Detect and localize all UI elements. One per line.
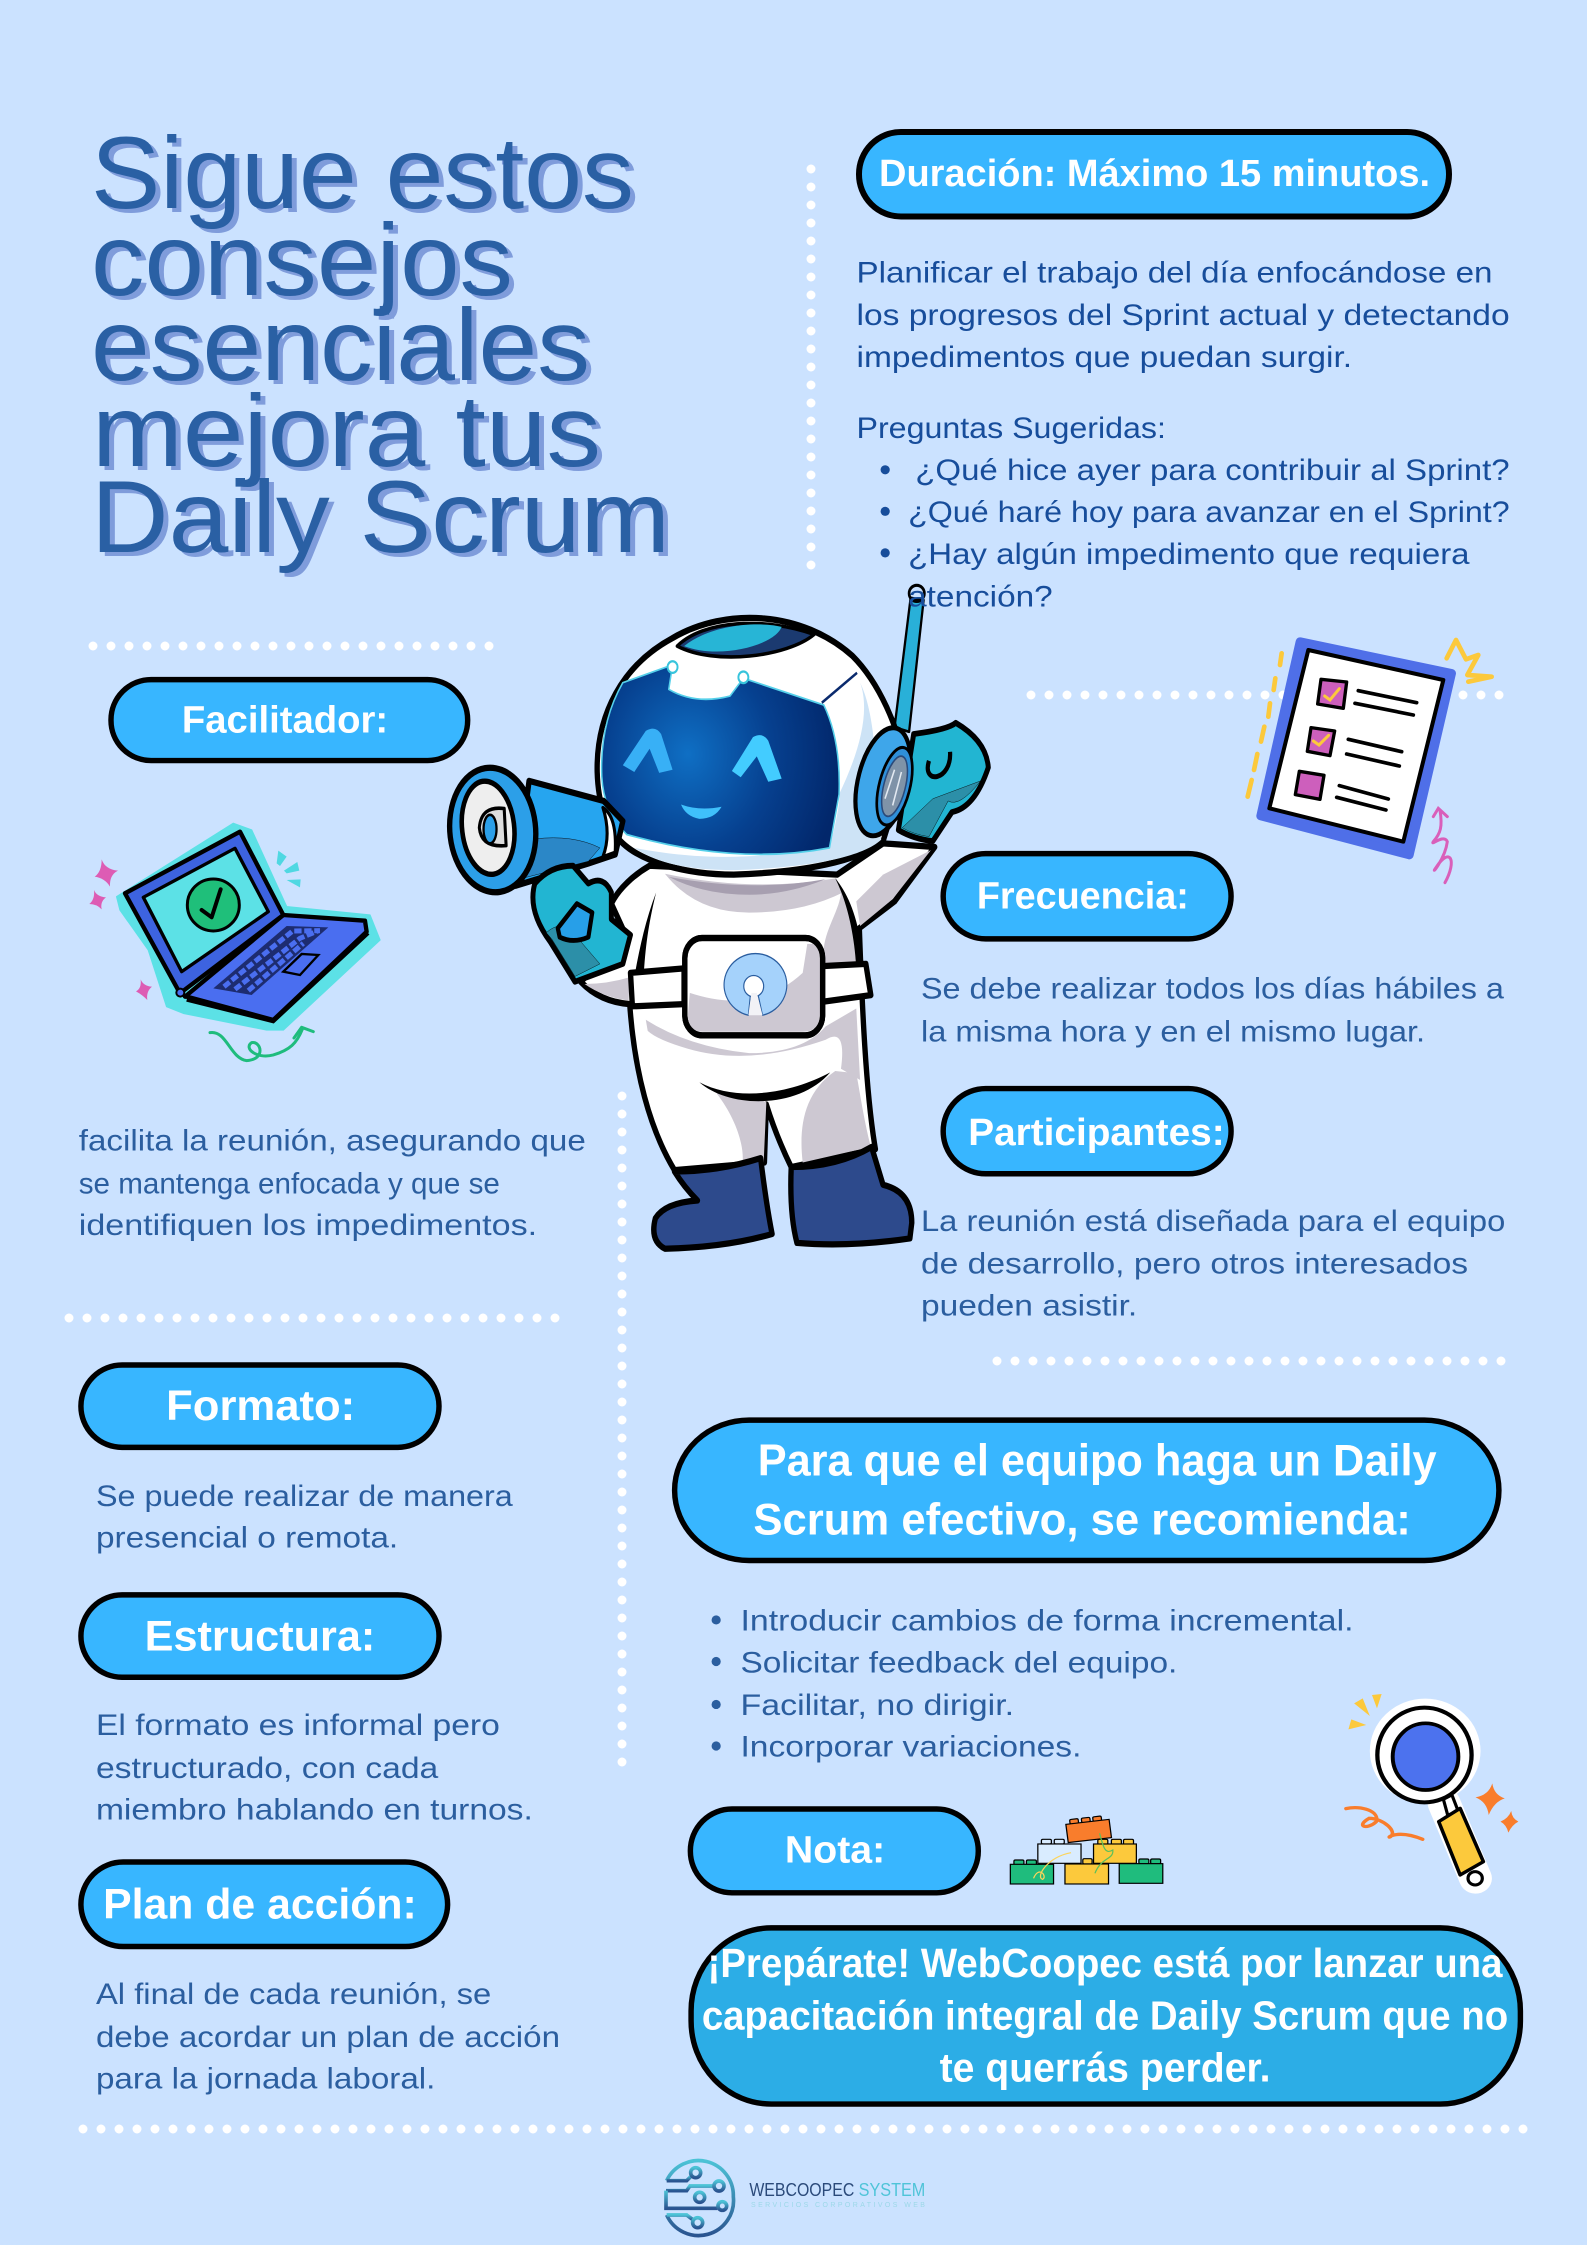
list: preguntas sugeridas: ¿Qué haré hoy para avanzar en el Sprint? xyxy=(908,496,1510,529)
astronaut boots xyxy=(654,1147,912,1249)
text: estructura: miembro hablando en turnos. xyxy=(96,1793,533,1826)
text: formato: presencial o remota. xyxy=(96,1521,398,1554)
icon: handheld disc and glove xyxy=(845,720,988,844)
list: preguntas sugeridas: atención? xyxy=(908,580,1053,613)
text: frecuencia: Se debe realizar todos los días hábiles a xyxy=(921,973,1504,1006)
pill: participantes xyxy=(943,1089,1231,1174)
text: planificar: impedimentos que puedan surgir. xyxy=(857,341,1352,374)
icon: antenna xyxy=(895,585,924,732)
icon: laptop xyxy=(89,823,380,1061)
title: Daily Scrum xyxy=(96,464,675,578)
panel: frecuencia xyxy=(921,854,1504,1049)
text: facilitador: identifiquen los impedimentos. xyxy=(79,1209,537,1242)
title: esenciales xyxy=(96,292,595,406)
icon: chest logo keyhole xyxy=(724,954,787,1015)
pill: facilitador xyxy=(111,680,468,761)
icon: megaphone and hand xyxy=(443,761,630,982)
text: facilitador: facilita la reunión, asegurando que xyxy=(79,1125,586,1158)
text: plan de acción: debe acordar un plan de acción xyxy=(96,2021,560,2054)
pill: nota: Nota: xyxy=(785,1829,885,1871)
callout: prepárate: ¡Prepárate! WebCoopec está por lanzar una xyxy=(708,1940,1503,1986)
icon: magnifier xyxy=(1346,1694,1518,1885)
text: participantes xyxy=(921,1205,1505,1322)
list: preguntas sugeridas: Preguntas Sugeridas: xyxy=(857,412,1166,445)
pill: recomendaciones heading: Scrum efectivo, se recomienda: xyxy=(753,1495,1411,1544)
pill: plan de acción: Plan de acción: xyxy=(103,1880,417,1928)
panel: estructura xyxy=(81,1595,533,1826)
list: recomendaciones: Facilitar, no dirigir. xyxy=(741,1689,1014,1722)
text: facilitador xyxy=(79,1125,586,1242)
pill: estructura: Estructura: xyxy=(145,1612,375,1660)
text: webcoopec system: WEBCOOPEC xyxy=(749,2179,854,2200)
text: plan de acción: para la jornada laboral. xyxy=(96,2063,435,2096)
title: esenciales xyxy=(91,288,590,402)
pill: duración: Duración: Máximo 15 minutos. xyxy=(879,153,1430,195)
text: webcoopec system xyxy=(749,2179,925,2209)
title: consejos xyxy=(91,203,513,317)
icon: lego bricks xyxy=(1010,1815,1163,1884)
text: formato xyxy=(96,1480,513,1554)
text: estructura: estructurado, con cada xyxy=(96,1752,439,1785)
text: planificar: los progresos del Sprint actual y detectando xyxy=(857,299,1510,332)
callout: prepárate xyxy=(691,1928,1520,2104)
text: facilitador: se mantenga enfocada y que se xyxy=(79,1168,500,1201)
text: participantes: pueden asistir. xyxy=(921,1289,1137,1322)
pill: formato xyxy=(81,1365,439,1447)
pill: formato: Formato: xyxy=(166,1382,355,1430)
pill: facilitador: Facilitador: xyxy=(182,699,388,741)
astronaut helmet xyxy=(597,618,906,875)
logo: webcoopec system xyxy=(666,2161,925,2236)
title: Daily Scrum xyxy=(91,460,670,574)
illustration: astronaut with megaphone xyxy=(443,585,988,1249)
text: frecuencia xyxy=(921,973,1504,1049)
list: recomendaciones: Solicitar feedback del equipo. xyxy=(741,1647,1177,1680)
pill: participantes: Participantes: xyxy=(968,1112,1225,1154)
text: plan de acción: Al final de cada reunión, se xyxy=(96,1978,491,2011)
title: consejos xyxy=(96,207,518,321)
pill: duración xyxy=(859,132,1449,216)
text: participantes: La reunión está diseñada para el equipo xyxy=(921,1205,1505,1238)
list: preguntas sugeridas: ¿Hay algún impedimento que requiera xyxy=(908,538,1470,571)
text: estructura: El formato es informal pero xyxy=(96,1709,500,1742)
title xyxy=(91,116,675,578)
list: recomendaciones: Incorporar variaciones. xyxy=(741,1730,1081,1763)
text: planificar: Planificar el trabajo del día enfocándose en xyxy=(857,257,1492,290)
pill: plan de acción xyxy=(81,1862,448,1947)
text: frecuencia: la misma hora y en el mismo lugar. xyxy=(921,1016,1425,1049)
list: recomendaciones xyxy=(712,1604,1354,1763)
text: webcoopec system: SYSTEM xyxy=(859,2179,925,2200)
pill: frecuencia: Frecuencia: xyxy=(977,876,1189,918)
pill: estructura xyxy=(81,1595,439,1677)
icon: checklist xyxy=(1248,640,1492,883)
panel: facilitador xyxy=(79,680,586,1242)
text: webcoopec system: SERVICIOS CORPORATIVOS WEB xyxy=(751,2202,925,2209)
callout: prepárate: capacitación integral de Daily Scrum que no xyxy=(702,1992,1508,2038)
astronaut body and arms xyxy=(581,843,935,1170)
list: preguntas sugeridas xyxy=(857,412,1510,613)
title: mejora tus xyxy=(97,378,606,492)
pill: nota xyxy=(690,1809,978,1893)
title: Sigue estos xyxy=(91,116,634,230)
text: estructura xyxy=(96,1709,533,1826)
astronaut belt and chest pack xyxy=(630,938,871,1035)
pill: recomendaciones heading: Para que el equipo haga un Daily xyxy=(758,1437,1437,1486)
title: Sigue estos xyxy=(96,120,639,234)
panel: recomendaciones xyxy=(675,1420,1499,1763)
panel: plan de acción xyxy=(81,1862,560,2096)
pill: frecuencia xyxy=(943,854,1231,939)
panel: participantes xyxy=(921,1089,1505,1322)
text: plan de acción xyxy=(96,1978,560,2096)
text: planificar xyxy=(857,257,1510,374)
list: recomendaciones: Introducir cambios de forma incremental. xyxy=(741,1604,1354,1637)
callout: prepárate: te querrás perder. xyxy=(940,2045,1270,2091)
list: preguntas sugeridas: ¿Qué hice ayer para contribuir al Sprint? xyxy=(915,454,1510,487)
title: mejora tus xyxy=(92,374,601,488)
text: participantes: de desarrollo, pero otros interesados xyxy=(921,1248,1468,1281)
text: formato: Se puede realizar de manera xyxy=(96,1480,513,1513)
panel: formato xyxy=(81,1365,513,1554)
face: eyes and smile xyxy=(623,729,782,819)
panel: duración xyxy=(857,132,1510,613)
icon: circuit circle xyxy=(666,2161,734,2236)
pill: recomendaciones heading xyxy=(675,1420,1499,1561)
